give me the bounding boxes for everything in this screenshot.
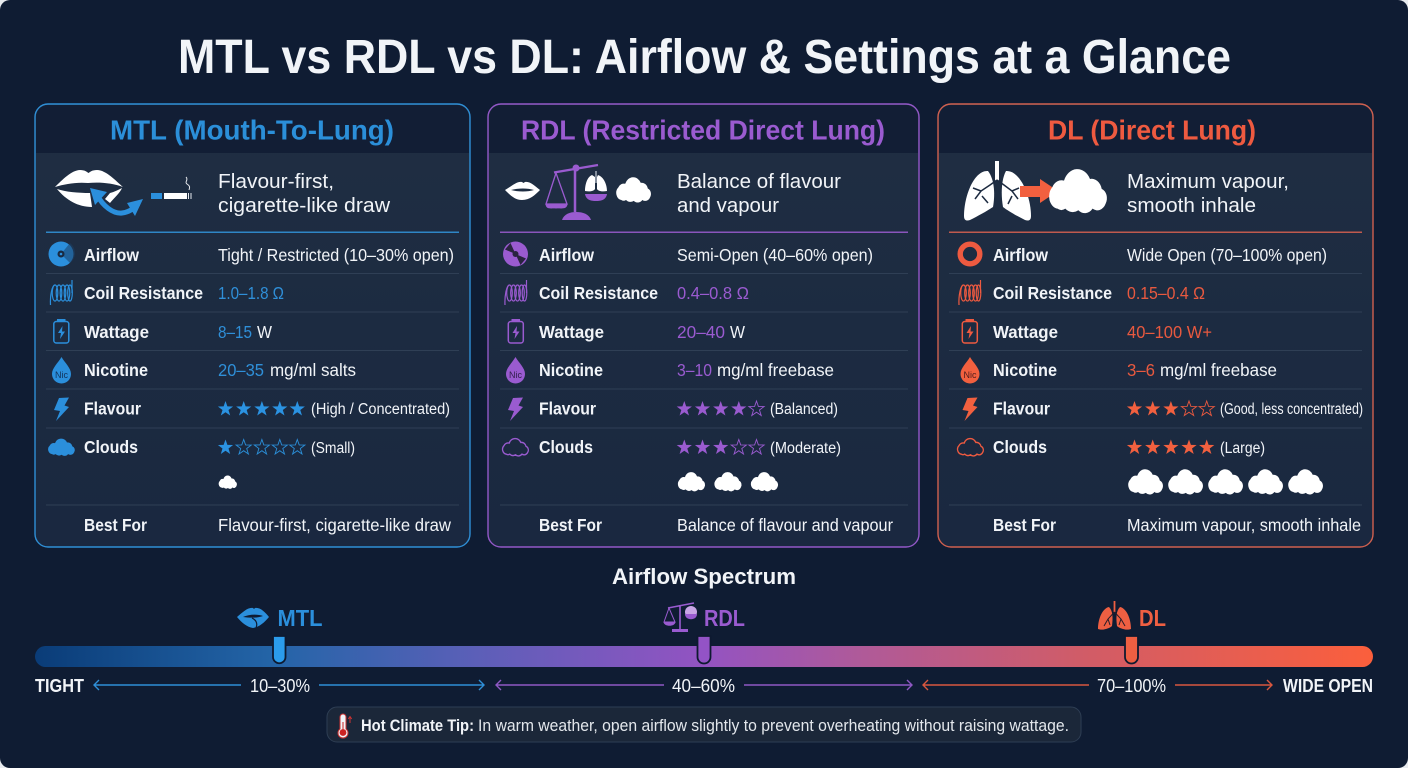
stars: flavour 4 of 5: [677, 401, 764, 416]
RDL summary: Balance of flavour: [677, 170, 841, 193]
label: Clouds: [539, 437, 593, 457]
RDL marker label: RDL: [704, 605, 745, 631]
arrow: RDL range left: [496, 680, 664, 690]
airflow spectrum chart: [35, 564, 1373, 696]
icon: lungs, arrow and cloud: [964, 161, 1107, 221]
RDL range: 40–60%: [672, 676, 735, 696]
marker: MTL: [273, 636, 286, 663]
panel: RDL: [488, 104, 919, 547]
RDL summary: [677, 170, 841, 217]
icon: airflow: [503, 242, 528, 266]
value: 40–100 W+: [1127, 322, 1212, 342]
value: Tight / Restricted (10–30% open): [218, 245, 454, 265]
stars: clouds 1 of 5: [218, 440, 305, 454]
arrow: DL range left: [923, 680, 1089, 690]
value: 20–40: [677, 322, 725, 342]
flavour note: (High / Concentrated): [311, 401, 450, 418]
value: 3–10: [677, 360, 712, 380]
DL heading: DL (Direct Lung): [1048, 114, 1256, 146]
value: 0.15–0.4 Ω: [1127, 283, 1205, 303]
panel: MTL: [35, 104, 470, 547]
label: Best For: [539, 515, 602, 535]
icon: nicotine drop: Nic: [55, 370, 68, 380]
arrow: DL range right: [1175, 680, 1272, 690]
callout: hot climate tip: [327, 707, 1081, 742]
flavour note: (Good, less concentrated): [1220, 401, 1363, 418]
icon: DL lungs: [1098, 601, 1131, 630]
label: Flavour: [539, 398, 596, 418]
label: Clouds: [84, 437, 138, 457]
icon: RDL scale: [664, 603, 697, 632]
label: Nicotine: [539, 360, 603, 380]
icon: coil: [50, 280, 72, 305]
icon: bolt: [962, 398, 978, 421]
label: Wattage: [993, 322, 1058, 342]
value: mg/ml salts: [270, 360, 356, 380]
label: Coil Resistance: [84, 283, 203, 303]
value: mg/ml freebase: [717, 360, 834, 380]
tip text: Hot Climate Tip:: [361, 717, 474, 735]
clouds note: (Small): [311, 440, 355, 457]
icon: nicotine drop: [506, 357, 525, 384]
flavour note: (Balanced): [770, 401, 838, 418]
icon: lips, balance scale, lungs and cloud: [505, 164, 651, 220]
marker: DL: [1125, 636, 1138, 664]
icon: nicotine drop: [960, 357, 980, 384]
icon: coil: [959, 280, 981, 305]
cloud size illustration: [1128, 469, 1323, 495]
label: Coil Resistance: [539, 283, 658, 303]
label: Nicotine: [993, 360, 1057, 380]
label: Best For: [993, 515, 1056, 535]
icon: cloud outline: [958, 439, 983, 456]
label: Clouds: [993, 437, 1047, 457]
value: 1.0–1.8 Ω: [218, 283, 284, 303]
icon: coil: [505, 280, 527, 305]
label: Flavour: [84, 398, 141, 418]
wide open end label: WIDE OPEN: [1283, 676, 1373, 696]
cloud size illustration: [678, 472, 778, 491]
MTL summary: cigarette-like draw: [218, 194, 390, 217]
clouds note: (Moderate): [770, 440, 841, 457]
DL marker label: DL: [1139, 605, 1166, 631]
icon: battery: [54, 319, 69, 343]
DL summary: Maximum vapour,: [1127, 170, 1289, 193]
icon: battery: [962, 319, 977, 343]
clouds note: (Large): [1220, 440, 1265, 457]
tight end label: TIGHT: [35, 676, 84, 696]
MTL summary: Flavour-first,: [218, 170, 334, 193]
value: Maximum vapour, smooth inhale: [1127, 515, 1361, 535]
MTL range: 10–30%: [250, 676, 310, 696]
icon: battery: [508, 319, 523, 343]
value: 8–15: [218, 322, 252, 342]
value: 20–35: [218, 360, 264, 380]
value: Balance of flavour and vapour: [677, 515, 893, 535]
label: Flavour: [993, 398, 1050, 418]
icon: MTL lips: [237, 608, 269, 628]
label: Best For: [84, 515, 147, 535]
value: Flavour-first, cigarette-like draw: [218, 515, 451, 535]
icon: airflow: [48, 242, 75, 266]
value: W: [257, 322, 272, 342]
title: MTL vs RDL vs DL: Airflow & Settings at a Glance: [178, 31, 1231, 84]
label: Airflow: [539, 245, 594, 265]
DL summary: [1127, 170, 1289, 217]
arrow: MTL range right: [319, 680, 484, 690]
stars: clouds 3 of 5: [677, 440, 764, 454]
stars: flavour 5 of 5: [218, 401, 305, 416]
value: mg/ml freebase: [1160, 360, 1277, 380]
MTL heading: MTL (Mouth-To-Lung): [110, 114, 394, 146]
marker: RDL: [698, 636, 710, 664]
label: Nicotine: [84, 360, 148, 380]
cloud size illustration: [219, 476, 237, 489]
icon: airflow: [960, 244, 980, 264]
value: Semi-Open (40–60% open): [677, 245, 873, 265]
panel: DL: [938, 104, 1373, 547]
DL range: 70–100%: [1097, 676, 1166, 696]
icon: nicotine drop: Nic: [964, 370, 977, 380]
value: [218, 360, 356, 380]
value: 3–6: [1127, 360, 1155, 380]
stars: flavour 3 of 5: [1127, 401, 1214, 416]
label: Wattage: [539, 322, 604, 342]
label: Airflow: [84, 245, 139, 265]
RDL heading: RDL (Restricted Direct Lung): [521, 114, 885, 146]
tip text: In warm weather, open airflow slightly to prevent overheating without raising wattage.: [478, 717, 1069, 735]
icon: cloud outline: [503, 439, 528, 456]
icon: thermometer: [338, 714, 352, 738]
RDL summary: and vapour: [677, 194, 779, 217]
MTL marker label: MTL: [278, 605, 322, 631]
icon: bolt: [508, 398, 523, 421]
value: 0.4–0.8 Ω: [677, 283, 749, 303]
gradient bar: [35, 646, 1373, 667]
spectrum heading: Airflow Spectrum: [612, 564, 796, 589]
arrow: MTL range left: [94, 680, 241, 690]
DL summary: smooth inhale: [1127, 194, 1256, 217]
label: Wattage: [84, 322, 149, 342]
icon: bolt: [54, 398, 69, 421]
icon: nicotine drop: [52, 357, 71, 384]
label: Coil Resistance: [993, 283, 1112, 303]
value: Wide Open (70–100% open): [1127, 245, 1327, 265]
arrow: RDL range right: [744, 680, 912, 690]
label: Airflow: [993, 245, 1048, 265]
icon: lips with airflow arrow and cigarette: [55, 170, 191, 216]
icon: nicotine drop: Nic: [509, 370, 522, 380]
icon: cloud: [48, 439, 75, 456]
MTL summary: [218, 170, 390, 217]
value: W: [730, 322, 745, 342]
stars: clouds 5 of 5: [1127, 440, 1214, 454]
